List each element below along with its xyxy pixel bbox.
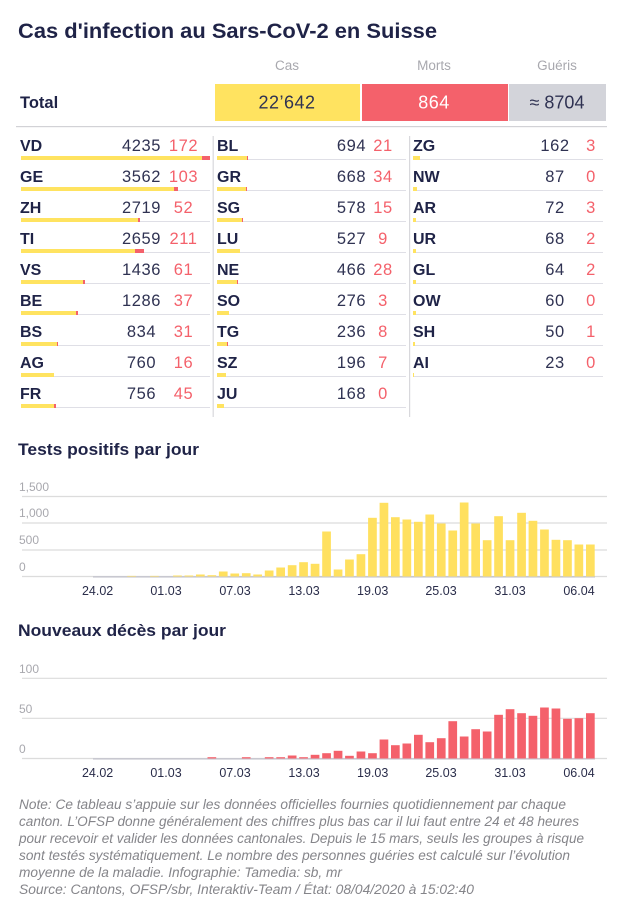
row SG: 578 (337, 199, 366, 217)
row TG (217, 323, 406, 346)
row FR: 45 (174, 385, 193, 403)
row AR: 72 (545, 199, 565, 217)
chart: nouveaux décès par jour (19, 662, 607, 780)
row NW: 0 (586, 168, 596, 186)
chart: nouveaux décès par jour: 24.02 (82, 766, 113, 780)
column heading: cas: Cas (275, 58, 299, 73)
row JU: JU (217, 386, 237, 403)
row ZG: 3 (586, 137, 596, 155)
chart: nouveaux décès par jour: 07.03 (219, 766, 251, 780)
row AG: 16 (174, 354, 193, 372)
total cases (215, 84, 360, 121)
footnote (18, 797, 584, 897)
row LU: LU (217, 231, 238, 248)
row GR: GR (217, 169, 241, 186)
row VD: 172 (169, 137, 198, 155)
chart: tests positifs par jour: 25.03 (425, 584, 457, 598)
row GE (20, 168, 210, 191)
row BL (217, 137, 406, 160)
chart: nouveaux décès par jour: 01.03 (150, 766, 182, 780)
chart: tests positifs par jour: 07.03 (219, 584, 251, 598)
chart: tests positifs par jour: 13.03 (288, 584, 320, 598)
row VS: 61 (174, 261, 193, 279)
row TI: 211 (169, 230, 198, 248)
row VD: VD (20, 138, 42, 155)
row ZG: ZG (413, 138, 435, 155)
footnote: pour recevoir et valider les données cantonales. Depuis le 15 mars, seuls les groupes à risque (18, 831, 584, 846)
row GR: 34 (373, 168, 393, 186)
row ZH: 2719 (122, 199, 161, 217)
row BS (20, 323, 210, 346)
row ZH: ZH (20, 200, 41, 217)
row OW: 60 (545, 292, 565, 310)
row BL: 21 (373, 137, 393, 155)
chart: tests positifs par jour: 06.04 (563, 584, 595, 598)
row SH (413, 323, 603, 346)
row ZG: 162 (540, 137, 570, 155)
row FR (20, 385, 210, 408)
row GE: 103 (169, 168, 198, 186)
row SO: 276 (337, 292, 366, 310)
row AI: AI (413, 355, 429, 372)
row VD: 4235 (122, 137, 161, 155)
row GL: GL (413, 262, 435, 279)
row AI: 0 (586, 354, 596, 372)
row BL: 694 (337, 137, 366, 155)
row JU (217, 385, 406, 408)
row AI (413, 354, 603, 377)
column heading: morts: Morts (417, 58, 451, 73)
row ZG (413, 137, 603, 160)
row AG (20, 354, 210, 377)
row UR (413, 230, 603, 253)
row SH: 50 (545, 323, 565, 341)
row TG: TG (217, 324, 239, 341)
row LU: 9 (378, 230, 388, 248)
row TG: 8 (378, 323, 388, 341)
row BS: BS (20, 324, 43, 341)
row SH: 1 (586, 323, 596, 341)
row VD (20, 137, 210, 160)
chart: nouveaux décès par jour: 19.03 (357, 766, 388, 780)
total deaths (362, 84, 508, 121)
row BS: 31 (174, 323, 193, 341)
row LU: 527 (337, 230, 366, 248)
chart: tests positifs par jour: 500 (19, 533, 39, 547)
row BE: 1286 (122, 292, 161, 310)
row SO (217, 292, 406, 315)
chart: tests positifs par jour: 31.03 (494, 584, 526, 598)
heading: deaths: Nouveaux décès par jour (18, 622, 227, 640)
chart: nouveaux décès par jour: 06.04 (563, 766, 595, 780)
row GR (217, 168, 406, 191)
row ZH (20, 199, 210, 222)
row BE: 37 (174, 292, 193, 310)
row GL: 64 (545, 261, 565, 279)
footnote: sont testés systématiquement. Le nombre des personnes guéries est calculé sur l’évolution (19, 848, 570, 863)
row JU: 168 (337, 385, 366, 403)
row SO: SO (217, 293, 240, 310)
footnote: moyenne de la maladie. Infographie: Tamedia: sb, mr (19, 865, 343, 880)
row SZ: 196 (337, 354, 366, 372)
total recovered (509, 84, 606, 121)
heading: tests: Tests positifs par jour (18, 441, 200, 459)
row SG (217, 199, 406, 222)
row TG: 236 (337, 323, 366, 341)
row AG: 760 (127, 354, 156, 372)
total label: Total (20, 94, 58, 112)
row FR: 756 (127, 385, 156, 403)
column heading: guéris: Guéris (537, 58, 577, 73)
row NE (217, 261, 406, 284)
row VS (20, 261, 210, 284)
chart: tests positifs par jour: 01.03 (150, 584, 182, 598)
footnote: canton. L’OFSP donne généralement des chiffres plus bas car il lui faut entre 24 et 48 heures (19, 814, 579, 829)
row BS: 834 (127, 323, 156, 341)
row FR: FR (20, 386, 42, 403)
chart: nouveaux décès par jour: 100 (19, 662, 39, 676)
row TI (20, 230, 210, 253)
total deaths: 864 (418, 92, 450, 112)
row OW: 0 (586, 292, 596, 310)
row ZH: 52 (174, 199, 193, 217)
row AR (413, 199, 603, 222)
chart: nouveaux décès par jour: 31.03 (494, 766, 526, 780)
row AI: 23 (545, 354, 565, 372)
row AG: AG (20, 355, 44, 372)
row SG: 15 (373, 199, 393, 217)
row VS: 1436 (122, 261, 161, 279)
row SG: SG (217, 200, 240, 217)
row GE: 3562 (122, 168, 161, 186)
row BE: BE (20, 293, 43, 310)
chart: nouveaux décès par jour: 25.03 (425, 766, 457, 780)
row OW (413, 292, 603, 315)
table column 1 (20, 137, 210, 408)
row LU (217, 230, 406, 253)
chart: nouveaux décès par jour: 13.03 (288, 766, 320, 780)
chart: tests positifs par jour (19, 480, 607, 598)
table column 2 (217, 137, 406, 408)
row NW: 87 (545, 168, 565, 186)
row NW (413, 168, 603, 191)
footnote: Source: Cantons, OFSP/sbr, Interaktiv-Team / État: 08/04/2020 à 15:02:40 (19, 882, 474, 897)
row UR: UR (413, 231, 437, 248)
chart: tests positifs par jour: 0 (19, 560, 26, 574)
row VS: VS (20, 262, 42, 279)
title: Cas d'infection au Sars-CoV-2 en Suisse (18, 20, 437, 43)
row TI: TI (20, 231, 34, 248)
row GR: 668 (337, 168, 366, 186)
row SH: SH (413, 324, 435, 341)
row UR: 68 (545, 230, 565, 248)
row NE: 466 (337, 261, 366, 279)
row JU: 0 (378, 385, 388, 403)
row NW: NW (413, 169, 441, 186)
row SZ: 7 (378, 354, 388, 372)
row GL (413, 261, 603, 284)
row BL: BL (217, 138, 239, 155)
row SZ (217, 354, 406, 377)
row BE (20, 292, 210, 315)
chart: tests positifs par jour: 1,500 (19, 480, 49, 494)
row GL: 2 (586, 261, 596, 279)
row AR: AR (413, 200, 437, 217)
row SO: 3 (378, 292, 388, 310)
row AR: 3 (586, 199, 596, 217)
row GE: GE (20, 169, 43, 186)
panel: totals (20, 58, 606, 121)
chart: tests positifs par jour: 1,000 (19, 506, 49, 520)
row OW: OW (413, 293, 441, 310)
footnote: Note: Ce tableau s’appuie sur les données officielles fournies quotidiennement par chaque (19, 797, 566, 812)
chart: nouveaux décès par jour: 0 (19, 742, 26, 756)
chart: tests positifs par jour: 19.03 (357, 584, 388, 598)
row TI: 2659 (122, 230, 161, 248)
row SZ: SZ (217, 355, 238, 372)
total recovered: ≈ 8704 (530, 92, 584, 112)
chart: tests positifs par jour: 24.02 (82, 584, 113, 598)
total cases: 22’642 (258, 92, 316, 112)
row NE: NE (217, 262, 240, 279)
chart: nouveaux décès par jour: 50 (19, 702, 33, 716)
row UR: 2 (586, 230, 596, 248)
table column 3 (413, 137, 603, 377)
row NE: 28 (373, 261, 393, 279)
